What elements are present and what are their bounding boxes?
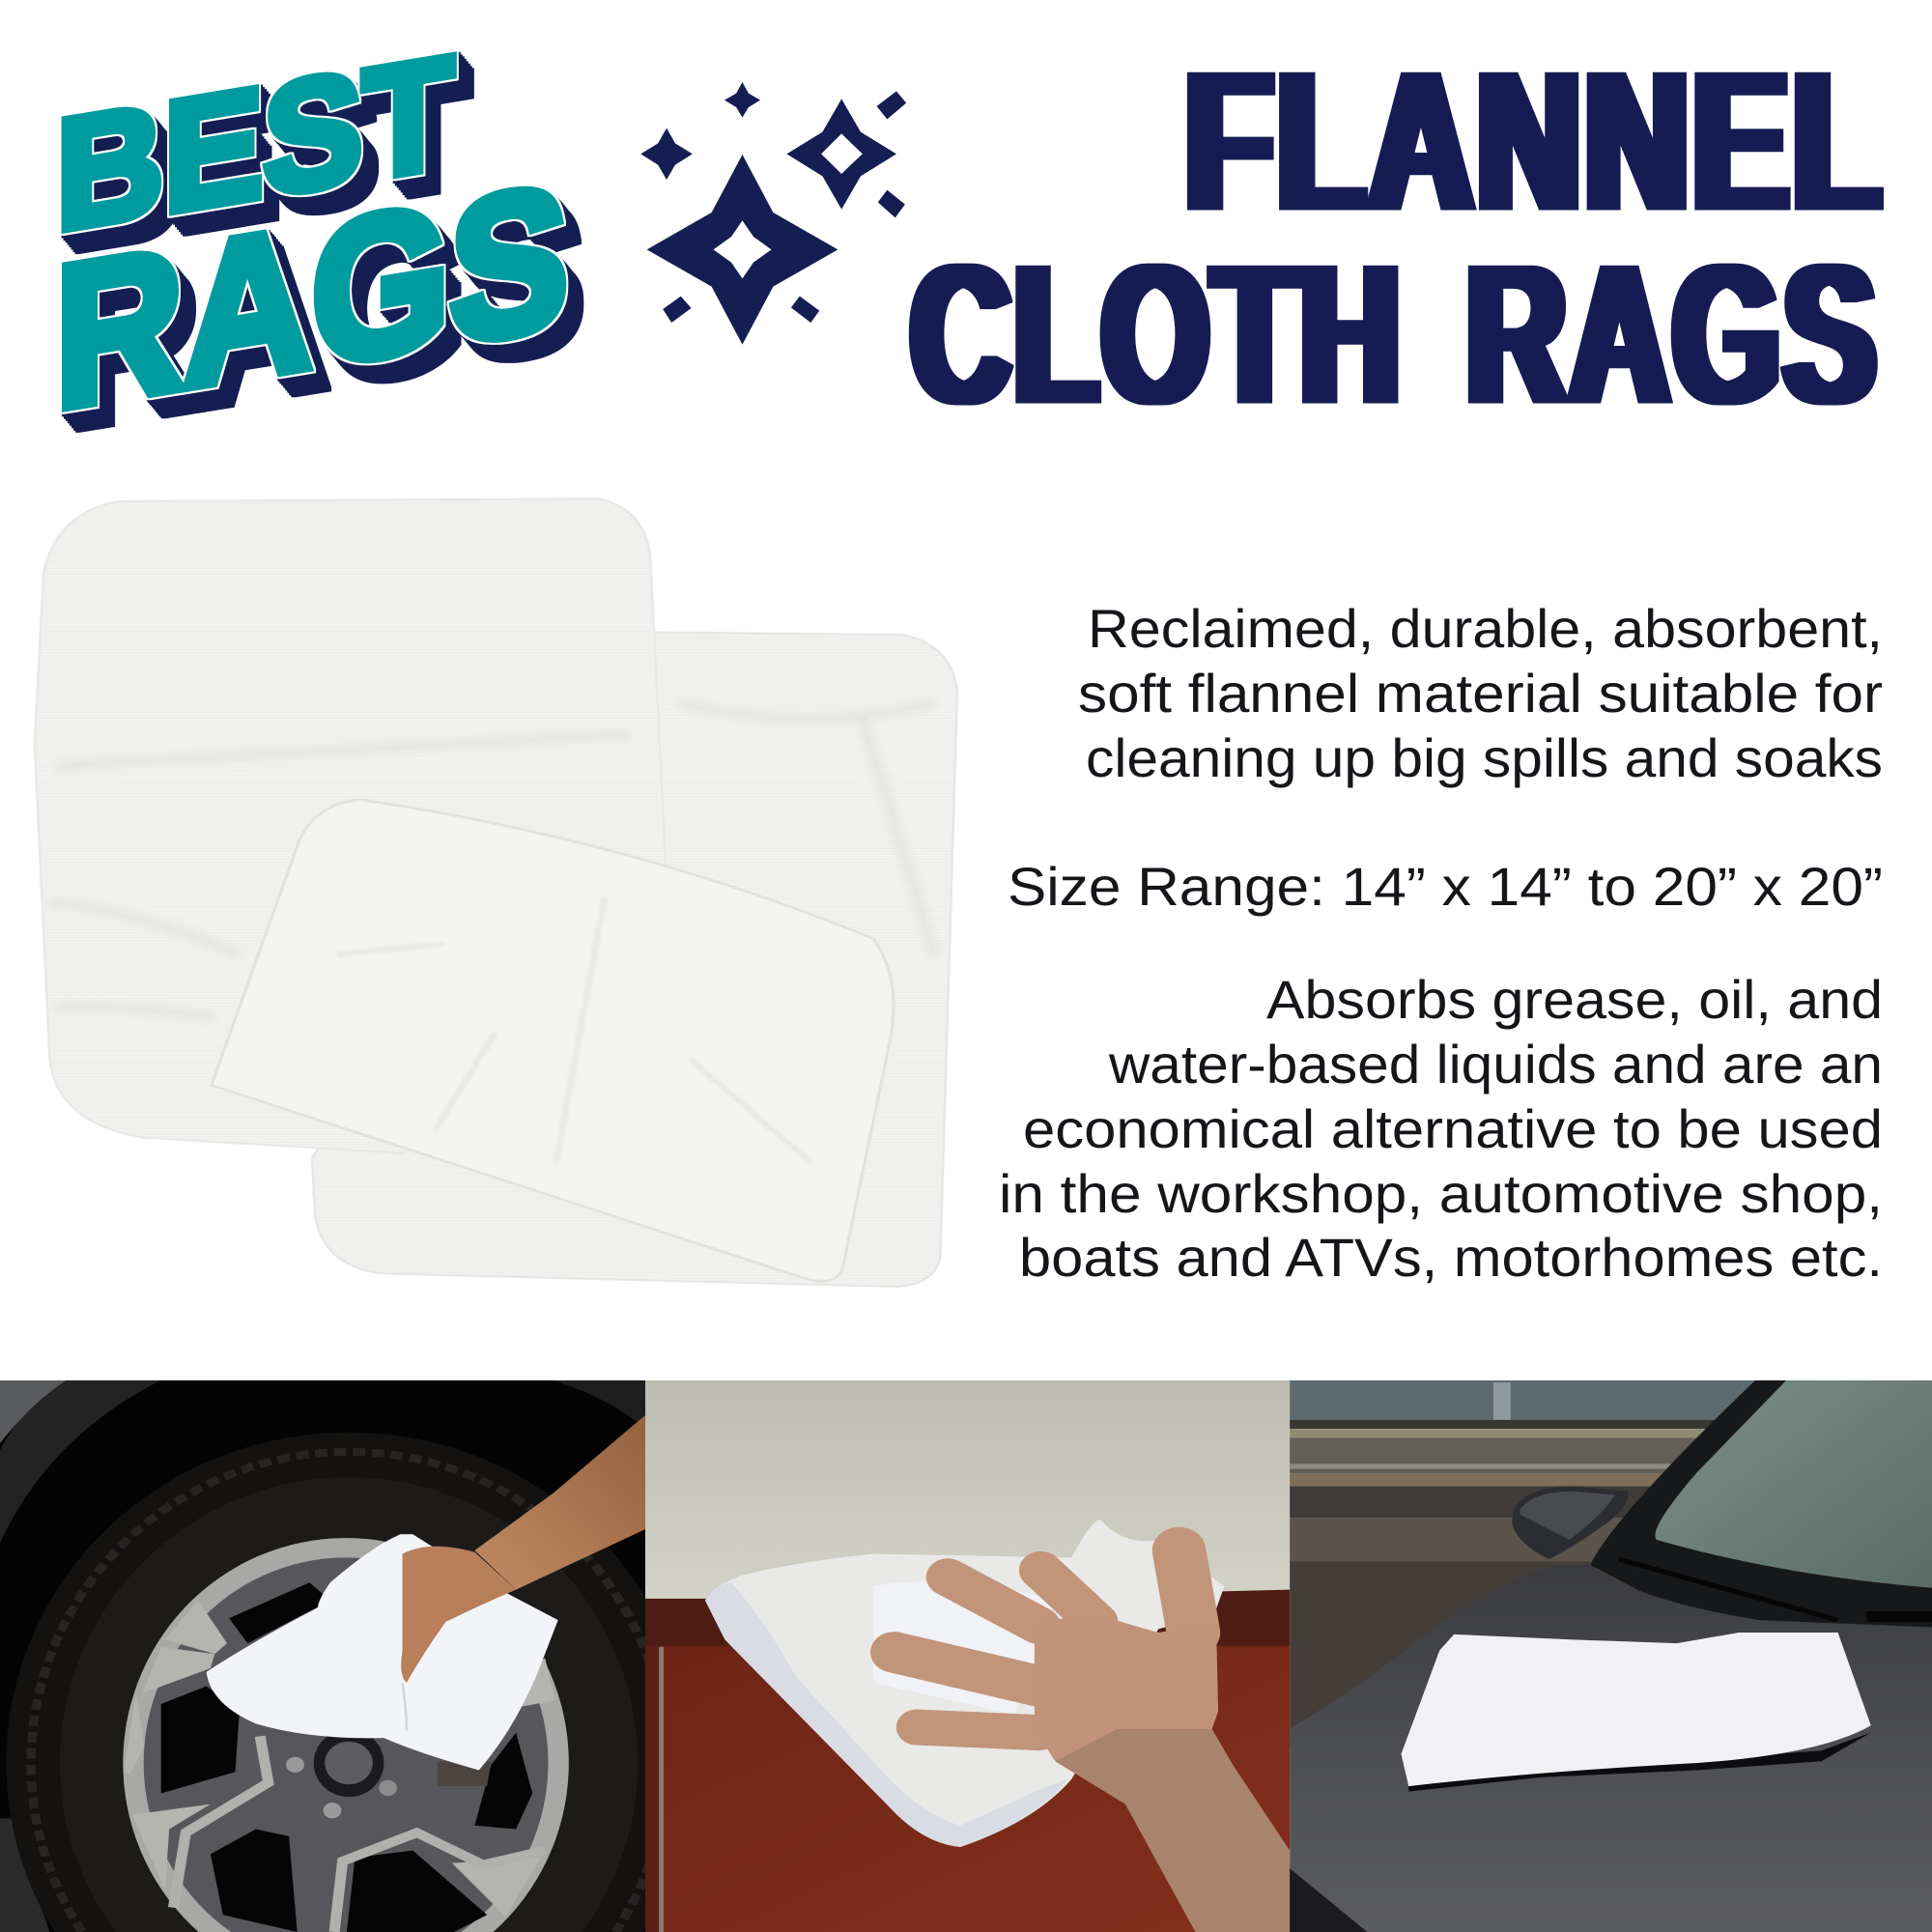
logo: Best Rags: BEST — [56, 23, 454, 264]
title: Flannel Cloth Rags: FLANNEL — [1185, 30, 1885, 253]
wheel hub — [314, 1729, 384, 1797]
rim spokes — [124, 1601, 555, 1917]
hand — [401, 1547, 516, 1683]
windshield and cowl — [1590, 1380, 1932, 1629]
folded top rag — [212, 800, 894, 1281]
arm — [474, 1414, 646, 1590]
title: Flannel Cloth Rags — [911, 30, 1885, 445]
icon: sparkles — [640, 82, 906, 345]
description text — [999, 598, 1883, 1288]
mirror — [1512, 1486, 1628, 1559]
rag wrinkles — [50, 703, 934, 1017]
towel — [207, 1534, 558, 1770]
tire — [6, 1433, 692, 1932]
rag creases — [336, 896, 812, 1164]
description text: economical alternative to be used — [1023, 1098, 1883, 1159]
logo: Best Rags: RAGS — [55, 142, 568, 450]
large front rag — [35, 498, 666, 1153]
rear rag — [312, 632, 957, 1287]
description text: boats and ATVs, motorhomes etc. — [1019, 1227, 1883, 1288]
rim — [123, 1538, 569, 1932]
rim openings — [161, 1582, 532, 1932]
photo: wiping a wood cabinet — [645, 1372, 1290, 1932]
car hood — [1290, 1565, 1932, 1932]
description text: Size Range: 14” x 14” to 20” x 20” — [1008, 856, 1883, 917]
description text: Absorbs grease, oil, and — [1266, 969, 1883, 1030]
title: Flannel Cloth Rags: CLOTH RAGS — [911, 224, 1880, 445]
rag — [1408, 1733, 1871, 1792]
photo: wiping a car wheel — [0, 1372, 692, 1932]
photo: stack of three flannel rags — [35, 498, 957, 1287]
hand — [895, 1550, 1193, 1733]
description text: cleaning up big spills and soaks — [1086, 727, 1883, 788]
description text: soft flannel material suitable for — [1078, 663, 1883, 724]
description text: in the workshop, automotive shop, — [999, 1163, 1883, 1224]
photo: rag on a car hood — [1290, 1372, 1932, 1932]
description text: Reclaimed, durable, absorbent, — [1088, 598, 1883, 659]
description text: water-based liquids and are an — [1108, 1034, 1883, 1094]
towel — [705, 1520, 1224, 1847]
